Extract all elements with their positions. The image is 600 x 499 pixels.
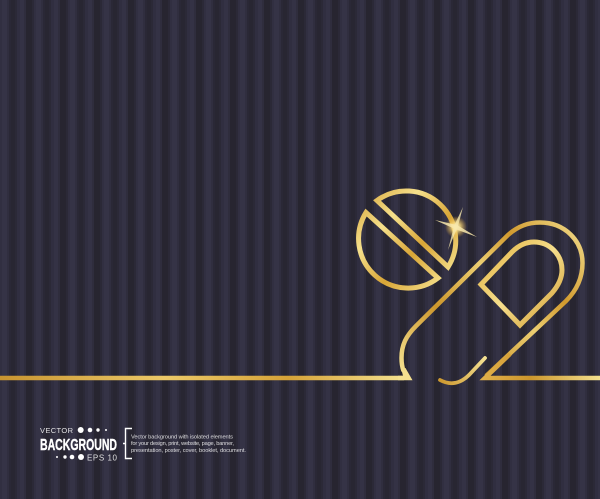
description text: Vector background with isolated elements	[131, 434, 233, 440]
logo: vector background eps 10	[40, 426, 246, 462]
ground line left	[0, 376, 404, 380]
EPS 10 label: EPS 10	[87, 454, 118, 462]
capsule base tip	[398, 368, 412, 380]
VECTOR label: VECTOR	[40, 426, 74, 435]
icon: round tablet split in two halves	[359, 191, 456, 288]
small curved highlight stroke	[440, 358, 485, 383]
bottom dots	[56, 454, 84, 460]
bracket	[123, 428, 132, 458]
tablet lower half	[359, 212, 438, 288]
description text	[131, 434, 246, 454]
description text: for your design, print, website, page, banner,	[131, 441, 234, 447]
ground line right	[485, 354, 600, 378]
icon: star sparkle	[435, 207, 477, 250]
tablet upper half	[377, 191, 456, 267]
top dots	[78, 427, 107, 433]
capsule outer outline	[402, 222, 582, 376]
BACKGROUND label: BACKGROUND	[40, 437, 117, 454]
capsule inner highlight	[481, 242, 562, 325]
icon: capsule outline with ground line	[0, 222, 600, 383]
description text: presentation, poster, cover, booklet, document.	[131, 448, 246, 454]
